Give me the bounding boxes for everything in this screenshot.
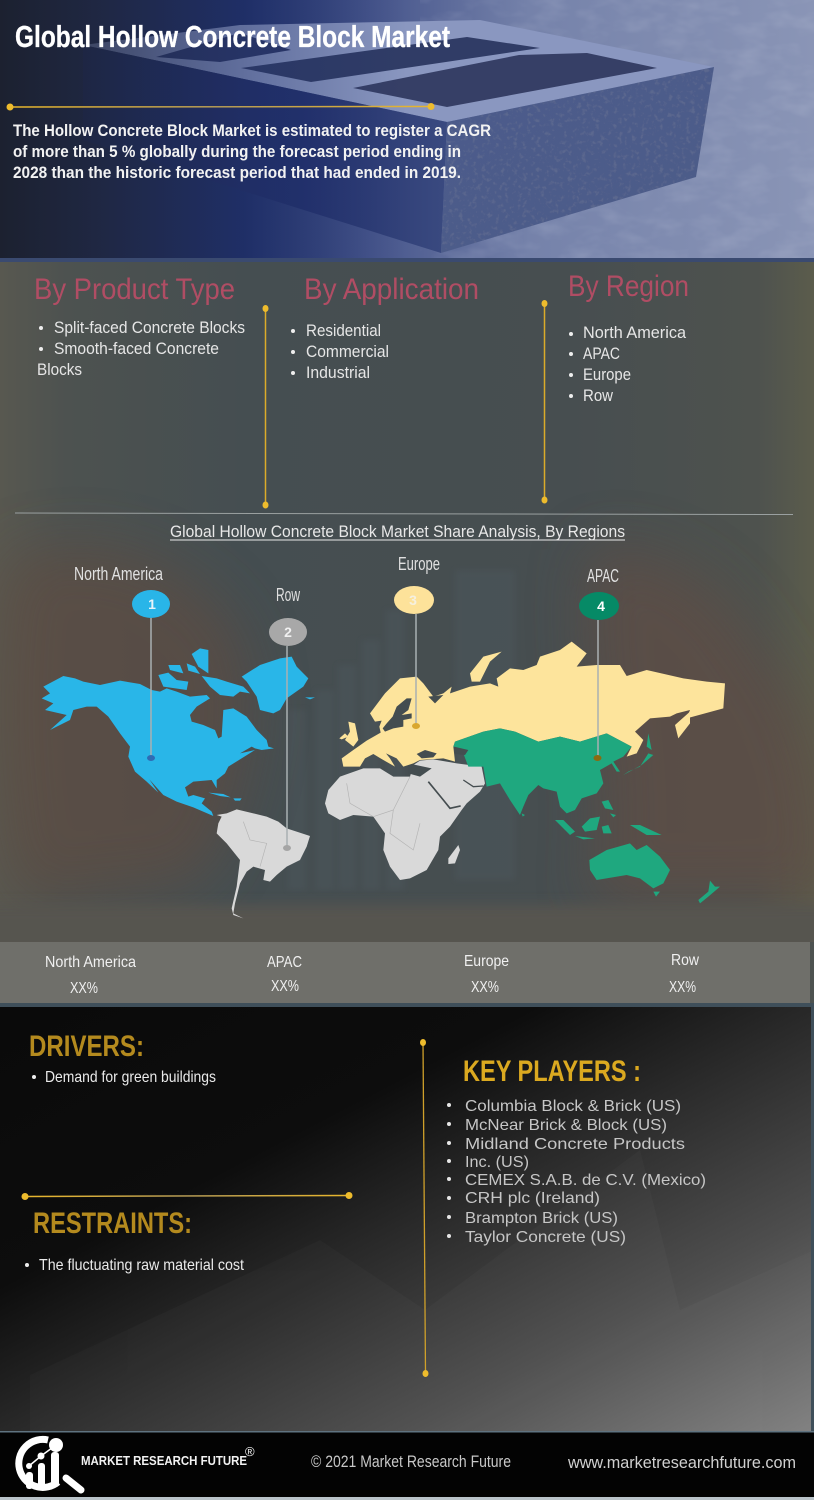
panel: region share table [0,942,814,1007]
callout: pin 3 Europe: 3 [409,592,417,608]
chart: world map by region [42,642,725,918]
map: North America [42,648,315,816]
divider: hero gold line [6,103,434,110]
list: regions: North America [583,323,687,342]
list: applications: Residential [306,321,381,340]
text block: intro description: The Hollow Concrete Block Market is estimated to register a CAGR [13,122,491,140]
list: key players: Brampton Brick (US) [465,1210,618,1227]
callout: pin 2 Row: Row [276,585,301,605]
list: key players: Inc. (US) [465,1154,529,1171]
heading: By Application: By Application [304,273,479,306]
list: key players: Taylor Concrete (US) [465,1229,626,1246]
divider: vertical gold line 3 [420,1039,428,1377]
text: website: www.marketresearchfuture.com [567,1453,796,1472]
callout: pin 4 APAC [579,566,619,761]
text: brand name: MARKET RESEARCH FUTURE [81,1453,247,1468]
callout: pin 1 North America: North America [74,564,164,584]
list: product types: Split-faced Concrete Blocks [54,318,245,337]
list: drivers: Demand for green buildings [45,1069,216,1086]
divider: vertical gold line 2 [542,300,548,504]
list: key players: McNear Brick & Block (US) [465,1117,667,1134]
text: copyright: © 2021 Market Research Future [311,1452,511,1471]
panel: region share table: XX% [271,978,299,995]
list: product types [37,318,245,379]
callout: pin 4 APAC: 4 [597,598,605,614]
heading: Restraints: RESTRAINTS: [33,1207,192,1240]
text block: intro description: 2028 than the historic forecast period that had ended in 2019. [13,164,461,182]
panel: footer [0,1431,814,1500]
callout: pin 2 Row: 2 [284,624,292,640]
text: registered mark: ® [245,1444,255,1459]
heading: By Region: By Region [568,270,689,303]
text block: intro description: of more than 5 % globally during the forecast period ending in [13,143,461,161]
map: Europe and Russia [339,642,725,767]
list: key players [447,1098,706,1246]
list: key players: CEMEX S.A.B. de C.V. (Mexico) [465,1172,706,1189]
divider: vertical gold line 1 [262,305,268,508]
list: regions: Row [583,386,614,405]
list: regions: APAC [583,344,620,363]
list: applications: Commercial [306,342,389,361]
list: key players: Midland Concrete Products [465,1136,685,1153]
panel: region share table: XX% [471,979,499,996]
panel: region share table: North America [45,954,136,971]
heading: Drivers: DRIVERS: [29,1030,144,1063]
panel: region share table: Europe [464,953,509,970]
list: regions [569,323,687,405]
panel: middle background [0,262,814,955]
panel: region share table: Row [671,952,699,969]
callout: pin 3 Europe: Europe [398,554,440,574]
panel: region share table: XX% [70,980,98,997]
icon: concrete block photo [84,20,714,253]
panel: region share table: XX% [669,979,696,996]
panel: hero photo header [0,0,814,262]
list: applications [291,321,389,382]
map: Africa, Middle East and South America [217,759,485,918]
icon: Market Research Future logo [19,1438,81,1490]
list: regions: Europe [583,365,631,384]
list: product types: Blocks [37,360,82,379]
callout: pin 1 North America [74,564,170,761]
callout: pin 3 Europe [394,554,440,729]
list: key players: Columbia Block & Brick (US) [465,1098,681,1115]
callout: pin 1 North America: 1 [148,596,156,612]
map: Asia Pacific [453,728,720,903]
list: product types: Smooth-faced Concrete [54,339,219,358]
heading: Key Players: KEY PLAYERS : [463,1055,641,1088]
list: key players: CRH plc (Ireland) [465,1190,600,1207]
callout: pin 2 Row [269,585,307,851]
list: restraints: The fluctuating raw material cost [39,1257,244,1274]
heading: main title: Global Hollow Concrete Block Market [15,19,450,54]
heading: share analysis subtitle: Global Hollow Concrete Block Market Share Analysis, By Regions [170,522,625,541]
text block: intro description [13,122,491,182]
panel: drivers, restraints and key players background [0,1007,814,1432]
list: applications: Industrial [306,363,370,382]
divider: restraints gold line [22,1192,352,1200]
panel: region share table: APAC [267,954,302,971]
heading: By Product Type: By Product Type [34,273,235,306]
callout: pin 4 APAC: APAC [587,566,619,586]
